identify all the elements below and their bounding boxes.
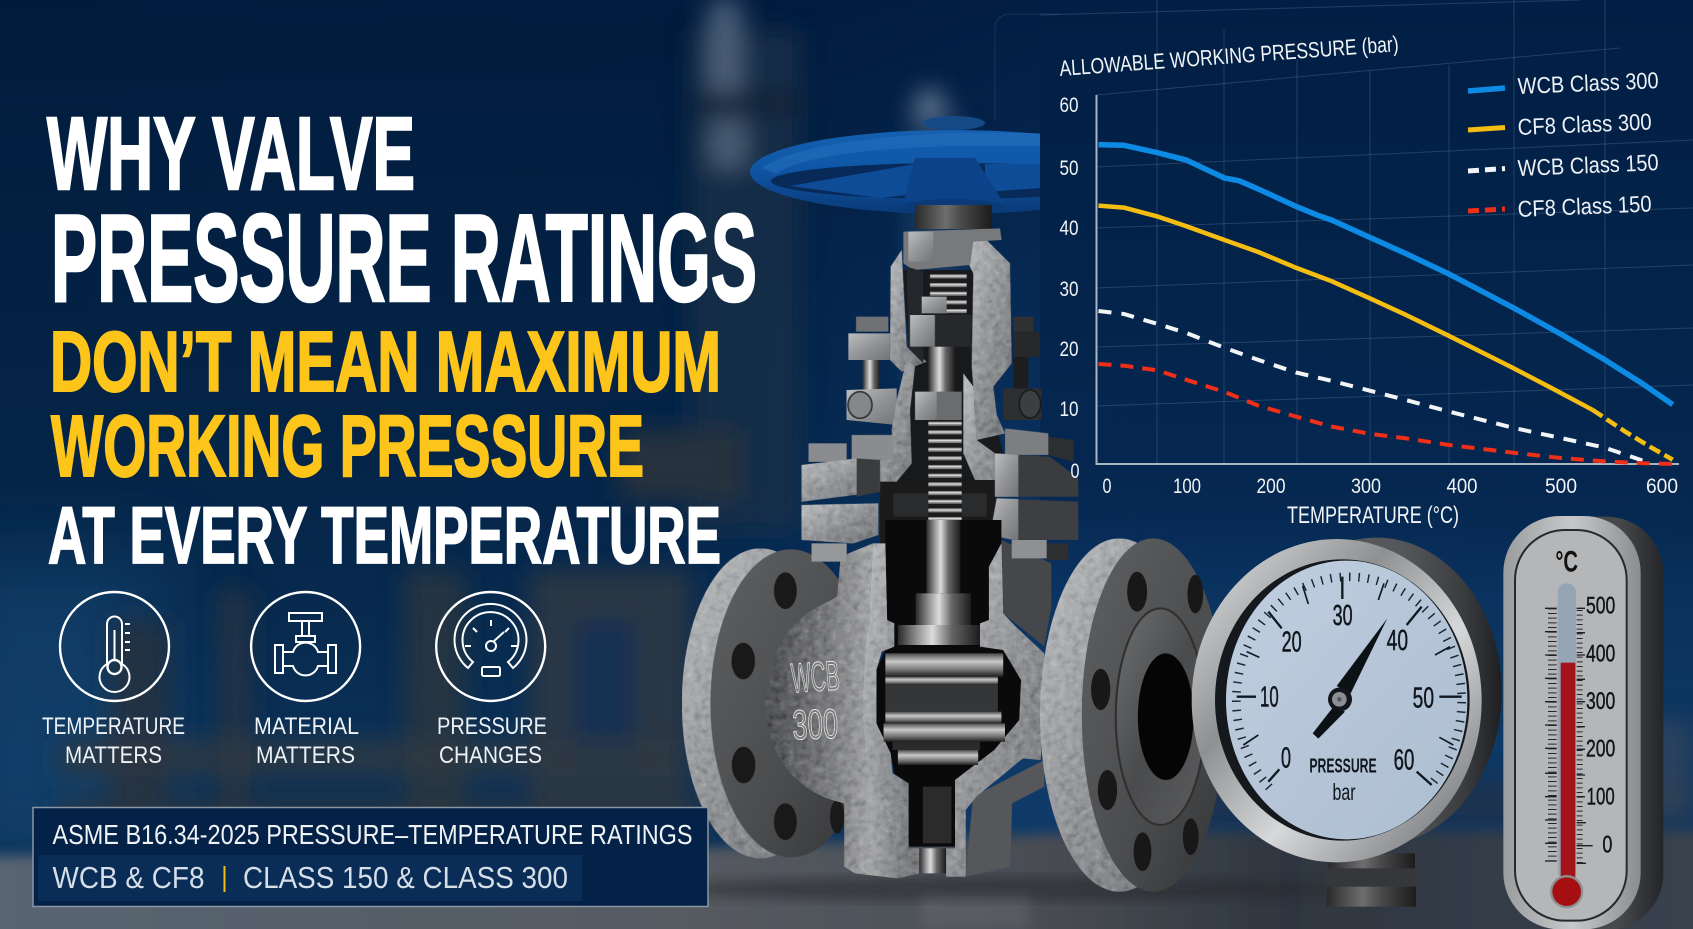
x axis labels: 600	[1646, 475, 1678, 498]
cavity	[876, 520, 1021, 847]
callout: standard reference box	[33, 808, 708, 906]
stem and disc	[884, 520, 1005, 765]
series: WCB Class 150	[1098, 311, 1652, 463]
stem	[928, 347, 955, 393]
gauge case	[1252, 538, 1502, 846]
y axis labels: 0	[1070, 460, 1080, 483]
y axis labels: 30	[1060, 278, 1078, 301]
threaded stem upper	[930, 273, 967, 315]
gauge numerals: 10	[1260, 682, 1279, 714]
threaded stem lower	[928, 420, 962, 540]
y axis labels: 10	[1060, 398, 1078, 421]
icon: temperature matters	[60, 592, 169, 701]
x axis labels	[1102, 475, 1678, 498]
x axis labels: 300	[1351, 475, 1381, 498]
legend item: CF8 Class 300: CF8 Class 300	[1517, 108, 1652, 140]
axes	[1096, 95, 1679, 464]
legend item: WCB Class 150: WCB Class 150	[1517, 149, 1659, 181]
gauge numerals: 30	[1333, 600, 1353, 632]
icon: pressure changes	[436, 592, 545, 701]
label: temperature matters	[42, 713, 185, 769]
gauge bezel	[1192, 539, 1482, 862]
gauge caption: PRESSURE	[1309, 755, 1377, 778]
thermometer	[1503, 516, 1663, 929]
gland right	[1003, 317, 1042, 420]
minor ticks	[1236, 577, 1462, 787]
thermometer numerals: 100	[1587, 783, 1615, 810]
title line 5: AT EVERY TEMPERATURE	[48, 491, 721, 581]
valve: lower body section	[766, 520, 1225, 892]
legend item: CF8 Class 150: CF8 Class 150	[1517, 190, 1652, 222]
callout line 2: CLASS 150 & CLASS 300	[243, 860, 568, 895]
bonnet flanges	[802, 458, 880, 543]
gauge caption: bar	[1332, 779, 1356, 805]
thermometer numerals: 200	[1586, 736, 1615, 763]
title line 4: WORKING PRESSURE	[51, 398, 644, 495]
valve: left flange	[682, 548, 871, 858]
thermometer numerals: 300	[1586, 688, 1615, 715]
series: CF8 Class 300	[1098, 206, 1673, 460]
y axis labels: 60	[1060, 94, 1078, 117]
gauge face	[1226, 561, 1467, 839]
pressure gauge	[1192, 538, 1502, 907]
thermometer numerals	[1586, 592, 1615, 858]
thermometer unit: °C	[1555, 546, 1578, 579]
thermometer numerals: 400	[1586, 641, 1615, 668]
thermometer right scale	[1571, 610, 1589, 863]
thermometer numerals: 0	[1602, 831, 1612, 858]
label: temperature matters: MATTERS	[65, 742, 162, 769]
label: pressure changes: PRESSURE	[437, 713, 547, 740]
floor surface	[0, 830, 1693, 929]
valve: handwheel	[750, 116, 1040, 214]
valve: lower body section: WCB	[789, 653, 841, 702]
section walls	[862, 540, 1044, 878]
cavity	[880, 480, 997, 600]
packing nut	[915, 392, 937, 420]
title line 2: PRESSURE RATINGS	[51, 190, 757, 328]
callout line 1: ASME B16.34-2025 PRESSURE–TEMPERATURE RATINGS	[52, 819, 692, 850]
series: CF8 Class 150	[1098, 364, 1672, 464]
right flange	[1040, 538, 1225, 892]
x axis labels: 200	[1256, 475, 1286, 498]
x axis labels: 400	[1446, 475, 1478, 498]
x axis labels: 500	[1545, 475, 1577, 498]
right outer body	[1001, 540, 1051, 647]
panel: chart background	[995, 0, 1693, 590]
valve: lower bonnet bolts	[812, 540, 1068, 562]
valve: bonnet and stem	[802, 205, 1078, 600]
gauge numerals: 50	[1413, 682, 1434, 714]
callout line 2: WCB & CF8	[52, 860, 204, 895]
y axis labels	[1060, 94, 1080, 483]
thermometer numerals: 500	[1586, 592, 1615, 619]
yoke	[890, 235, 1012, 440]
gauge caption	[1309, 755, 1377, 805]
title	[47, 96, 757, 581]
callout line 2	[52, 860, 568, 895]
legend item: WCB Class 300: WCB Class 300	[1517, 67, 1659, 99]
legend item: WCB Class 300	[1468, 67, 1659, 99]
gauge numerals: 60	[1394, 744, 1414, 776]
x axis labels: 100	[1173, 475, 1201, 498]
thermometer plate	[1517, 517, 1663, 929]
title line 1: WHY VALVE	[47, 96, 415, 211]
label: material matters: MATTERS	[256, 742, 355, 769]
gauge numerals: 40	[1387, 625, 1408, 657]
bonnet cut walls	[880, 360, 1018, 497]
gauge numerals: 0	[1281, 743, 1291, 775]
label: pressure changes: CHANGES	[439, 742, 542, 769]
y axis labels: 20	[1060, 338, 1078, 361]
legend	[1468, 67, 1659, 222]
label: temperature matters: TEMPERATURE	[42, 713, 185, 740]
series: WCB Class 300	[1098, 145, 1673, 405]
stem collar	[915, 205, 992, 229]
label: pressure changes	[437, 713, 547, 769]
body marking: WCB 300: 300	[791, 701, 839, 749]
x axis labels: 0	[1102, 475, 1112, 498]
gauge numerals: 20	[1282, 627, 1302, 659]
chart: allowable working pressure vs temperature	[1040, 0, 1693, 529]
thermometer left scale	[1539, 608, 1565, 862]
y axis labels: 50	[1060, 157, 1078, 180]
body marking: WCB 300	[789, 653, 841, 749]
x axis title: TEMPERATURE (°C)	[1287, 502, 1459, 529]
icon: material matters	[251, 592, 360, 701]
thermometer bulb	[1550, 875, 1583, 908]
label: material matters	[254, 713, 359, 769]
left body casting	[766, 543, 898, 878]
yoke nut	[922, 297, 947, 313]
gauge numerals	[1260, 600, 1434, 776]
bonnet nuts	[808, 443, 847, 462]
silhouette backing	[880, 270, 1013, 497]
title line 3: DON’T MEAN MAXIMUM	[50, 315, 721, 410]
gauge needle	[1313, 618, 1387, 739]
label: material matters: MATERIAL	[254, 713, 359, 740]
gauge stem	[1328, 853, 1415, 870]
major ticks	[1237, 577, 1462, 785]
y axis labels: 40	[1060, 217, 1078, 240]
gland left	[847, 317, 897, 425]
y axis title: ALLOWABLE WORKING PRESSURE (bar)	[1059, 31, 1399, 81]
thermometer tube	[1558, 583, 1576, 880]
chart grid lines	[1040, 0, 1693, 464]
